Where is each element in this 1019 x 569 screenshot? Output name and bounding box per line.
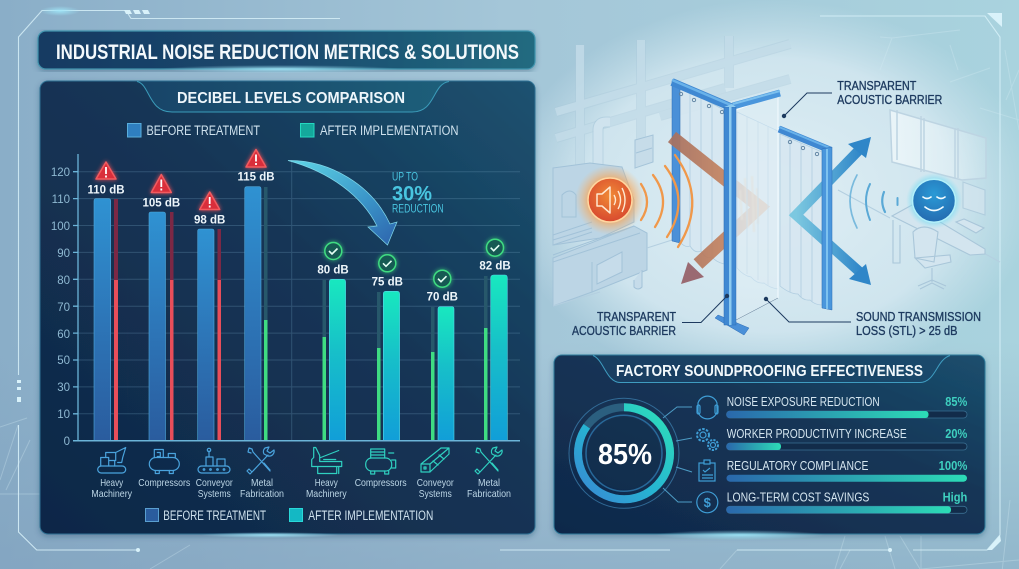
icon: crossed tools: [475, 447, 502, 474]
warning icons and before values: 110 dB: [87, 184, 125, 196]
title bar: [38, 31, 535, 73]
callout: up to 30% reduction: UP TO: [392, 172, 418, 184]
before treatment category labels: Metal: [251, 477, 273, 489]
check icons and after values: 70 dB: [427, 292, 458, 304]
bar chart: [51, 150, 520, 448]
label: transparent acoustic barrier (top): TRANSPARENT: [837, 79, 917, 93]
metric: long-term cost savings: [697, 490, 967, 513]
arrow: reduction curve: [288, 160, 397, 245]
metric: noise exposure reduction: [697, 394, 968, 419]
bars: before treatment: [94, 187, 268, 441]
heading text: DECIBEL LEVELS COMPARISON: [177, 90, 405, 107]
warning icons and before values: 105 dB: [142, 198, 180, 210]
icon: dollar: [697, 492, 718, 513]
icon: heavy machinery: [98, 448, 126, 473]
effectiveness heading: FACTORY SOUNDPROOFING EFFECTIVENESS: [616, 363, 923, 380]
panel heading tab: [137, 82, 449, 112]
panel: factory soundproofing effectiveness: [554, 355, 985, 534]
metric: worker productivity increase: [697, 426, 968, 450]
callout: up to 30% reduction: REDUCTION: [392, 204, 444, 216]
y axis: 60: [57, 329, 70, 341]
metric: regulatory compliance: REGULATORY COMPLIANCE: [727, 458, 869, 473]
y axis: 120: [51, 167, 70, 179]
left frame post: [672, 80, 733, 243]
y axis: 10: [57, 409, 70, 421]
check icons and after values: 82 dB: [479, 260, 511, 272]
after implementation category labels: Heavy: [315, 477, 338, 489]
icon: air compressor: [366, 449, 396, 474]
label: sound transmission loss: LOSS (STL) > 25 dB: [856, 324, 958, 338]
check icons and after values: 75 dB: [372, 277, 403, 289]
noise sound waves: [641, 155, 692, 247]
icon: gears: [697, 429, 718, 450]
bottom legend: [146, 508, 433, 523]
top legend: BEFORE TREATMENT: [146, 123, 260, 138]
y axis: 110: [52, 194, 70, 206]
icon: tools: [247, 447, 274, 474]
metric: noise exposure reduction: 85%: [945, 394, 968, 409]
icon: dollar: $: [704, 495, 712, 510]
y axis: 0: [64, 436, 70, 448]
ring value: 85%: [598, 439, 652, 471]
background office desk and chair: [892, 182, 985, 289]
wall box: [635, 135, 653, 168]
before treatment category icons: [98, 447, 274, 474]
after implementation category labels: Compressors: [355, 477, 407, 489]
label: sound transmission loss: [764, 297, 981, 338]
metric: regulatory compliance: 100%: [939, 458, 968, 473]
metric: worker productivity increase: WORKER PRODUCTIVITY INCREASE: [727, 426, 907, 441]
noise source speaker icon: [575, 165, 645, 235]
icon: headset: [697, 396, 718, 419]
bottom legend: AFTER IMPLEMENTATION: [308, 508, 433, 523]
after implementation category icons: [312, 447, 502, 474]
check icons and after values: [317, 239, 511, 304]
before treatment category labels: Compressors: [138, 477, 190, 489]
before treatment category labels: Fabrication: [240, 488, 284, 500]
callout: up to 30% reduction: [392, 172, 444, 216]
icon: conveyor beam: [421, 448, 449, 472]
warning icons and before values: [87, 150, 275, 226]
label: sound transmission loss: SOUND TRANSMISSION: [856, 310, 981, 324]
y axis: [51, 154, 78, 448]
before treatment category labels: Systems: [198, 488, 231, 500]
middle curtain and glass panel: [736, 94, 778, 320]
title text: INDUSTRIAL NOISE REDUCTION METRICS & SOLUTIONS: [56, 41, 519, 64]
top legend: [128, 123, 458, 138]
top legend: AFTER IMPLEMENTATION: [320, 123, 458, 138]
after implementation category labels: Conveyor: [417, 477, 454, 489]
panel: decibel levels comparison: [40, 81, 535, 534]
label: transparent acoustic barrier (top): [782, 79, 942, 118]
y axis: 70: [57, 302, 70, 314]
icon: clipboard: [699, 460, 715, 481]
connectors: [663, 407, 692, 502]
metric: regulatory compliance: [699, 458, 968, 482]
metric: worker productivity increase: 20%: [945, 426, 968, 441]
before treatment category labels: Heavy: [100, 477, 124, 489]
effectiveness heading: [593, 356, 950, 382]
after implementation category labels: [306, 477, 511, 500]
after implementation category labels: Machinery: [306, 488, 347, 500]
floor lines: [553, 190, 1000, 306]
icon: press machine: [312, 448, 342, 474]
background machine: [553, 163, 647, 306]
after implementation category labels: Metal: [478, 477, 500, 489]
warning icons and before values: 98 dB: [194, 214, 225, 226]
metric: noise exposure reduction: NOISE EXPOSURE REDUCTION: [727, 394, 880, 409]
bottom legend: BEFORE TREATMENT: [163, 508, 266, 523]
label: transparent acoustic barrier (bottom): ACOUSTIC BARRIER: [572, 324, 676, 338]
check icons and after values: 80 dB: [317, 264, 349, 276]
arrows: reduced transmitted sound: [796, 137, 871, 285]
before treatment category labels: [91, 477, 284, 500]
label: transparent acoustic barrier (bottom): TRANSPARENT: [597, 310, 676, 324]
right curtain: [780, 134, 822, 305]
callout: up to 30% reduction: 30%: [392, 183, 432, 206]
background factory pipes: [556, 36, 790, 167]
label: transparent acoustic barrier (bottom): [572, 294, 729, 338]
y axis: 30: [57, 382, 70, 394]
quiet sound waves: [850, 175, 898, 228]
arrow: incident noise reflected: [672, 137, 760, 284]
illustration: acoustic barrier scene: [553, 36, 1000, 338]
bars: after implementation: [322, 275, 507, 441]
after implementation category labels: Fabrication: [467, 488, 511, 500]
icon: compressor: [149, 450, 179, 474]
background office window: [890, 110, 986, 180]
front and right frame posts: [715, 91, 832, 335]
label: transparent acoustic barrier (top): ACOUSTIC BARRIER: [837, 93, 942, 107]
before treatment category labels: Conveyor: [196, 477, 233, 489]
warning icons and before values: 115 dB: [237, 172, 275, 184]
y axis: 80: [57, 275, 70, 287]
metric: long-term cost savings: LONG-TERM COST SAVINGS: [727, 490, 870, 505]
y axis: 50: [57, 355, 70, 367]
before treatment category labels: Machinery: [91, 488, 133, 500]
left curtain: [680, 86, 724, 264]
y axis: 100: [51, 221, 70, 233]
ring gauge 85%: [569, 398, 679, 508]
metric: long-term cost savings: High: [943, 490, 967, 505]
y axis: 90: [57, 248, 70, 260]
happy face icon: [906, 173, 962, 229]
icon: conveyor: [198, 448, 230, 473]
after implementation category labels: Systems: [419, 488, 452, 500]
